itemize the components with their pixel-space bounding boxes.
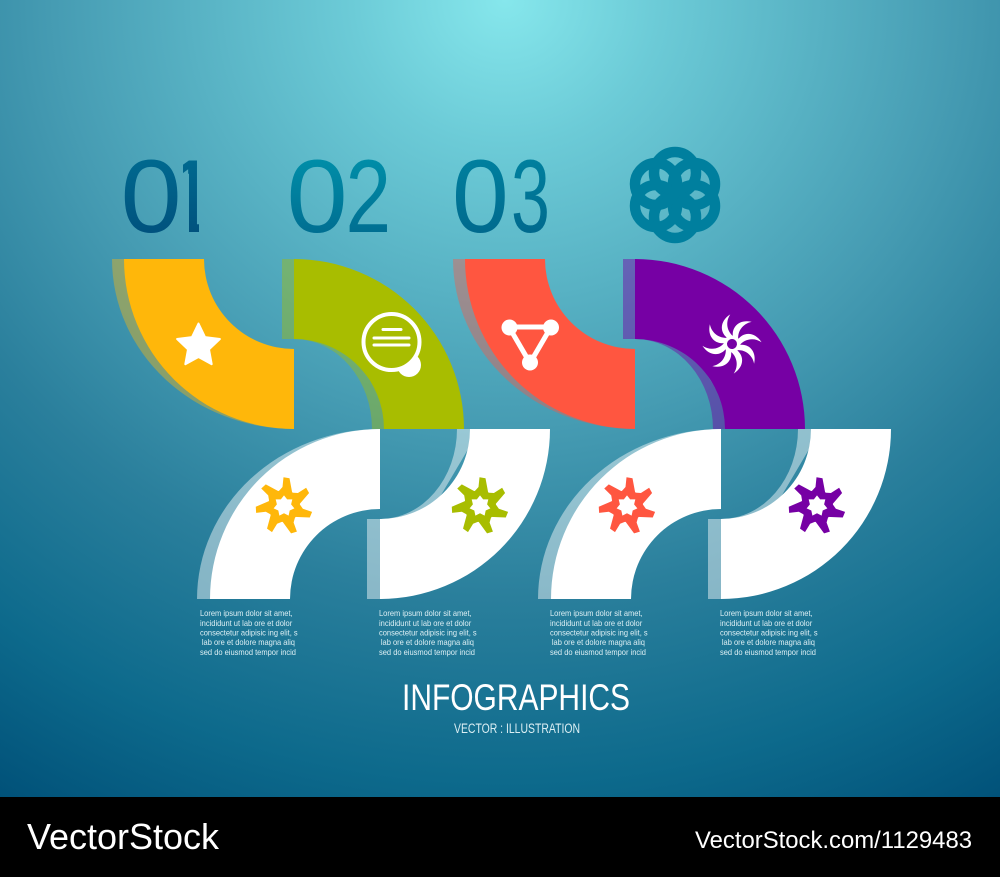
icon: speech bubble [364, 314, 421, 377]
text block 1: consectetur adipisic ing elit, s [200, 628, 298, 638]
icon: yellow gear [254, 477, 313, 535]
panel: red arc [453, 259, 635, 429]
text block 1: lab ore et dolore magna aliq [202, 638, 295, 647]
panel: white arc 2 [367, 429, 550, 599]
text block 2: Lorem ipsum dolor sit amet, [379, 609, 472, 618]
number 01 [124, 160, 199, 233]
text block 4: incididunt ut lab ore et dolor [720, 619, 813, 628]
text block 3: consectetur adipisic ing elit, s [550, 628, 648, 638]
text block 2: sed do eiusmod tempor incid [379, 648, 475, 657]
icon: red gear [597, 477, 656, 535]
text block 4: Lorem ipsum dolor sit amet, [720, 609, 813, 618]
icon: purple gear [787, 477, 846, 535]
panel: white arc 1 [197, 429, 380, 599]
icon: swirl [696, 308, 768, 380]
number 01: 0 [120, 138, 182, 254]
text block 3: incididunt ut lab ore et dolor [550, 619, 643, 628]
footer bar [0, 797, 1000, 877]
panel: green arc [282, 259, 464, 429]
icon: green gear [450, 477, 509, 535]
text block 1: Lorem ipsum dolor sit amet, [200, 609, 293, 618]
text block 4: sed do eiusmod tempor incid [720, 648, 816, 657]
text block 1: sed do eiusmod tempor incid [200, 648, 296, 657]
title: INFOGRAPHICS [402, 677, 630, 718]
footer logo: VectorStock [27, 816, 220, 857]
text block 4: consectetur adipisic ing elit, s [720, 628, 818, 638]
subtitle: VECTOR : ILLUSTRATION [454, 721, 580, 736]
panel: white arc 4 [708, 429, 891, 599]
number 03 [452, 138, 550, 254]
text block 1: incididunt ut lab ore et dolor [200, 619, 293, 628]
panel: purple arc [623, 259, 805, 429]
number 03: 3 [511, 138, 550, 254]
panel: white arc 3 [538, 429, 721, 599]
panel: yellow arc [112, 259, 294, 429]
number 03: 0 [452, 138, 509, 254]
text block 4: lab ore et dolore magna aliq [722, 638, 815, 647]
text block 3: Lorem ipsum dolor sit amet, [550, 609, 643, 618]
text block 2: incididunt ut lab ore et dolor [379, 619, 472, 628]
number 01: 1 [163, 138, 219, 254]
text block 3: sed do eiusmod tempor incid [550, 648, 646, 657]
footer image id: VectorStock.com/1129483 [695, 827, 972, 854]
number 02: 2 [346, 138, 391, 254]
text block 2: consectetur adipisic ing elit, s [379, 628, 477, 638]
number 02: 0 [286, 138, 348, 254]
text block 3: lab ore et dolore magna aliq [552, 638, 645, 647]
icon: star [177, 324, 220, 364]
text block 2: lab ore et dolore magna aliq [381, 638, 474, 647]
icon: triangle network [502, 320, 559, 370]
icon: ring flower [635, 152, 715, 238]
number 02 [286, 138, 391, 254]
